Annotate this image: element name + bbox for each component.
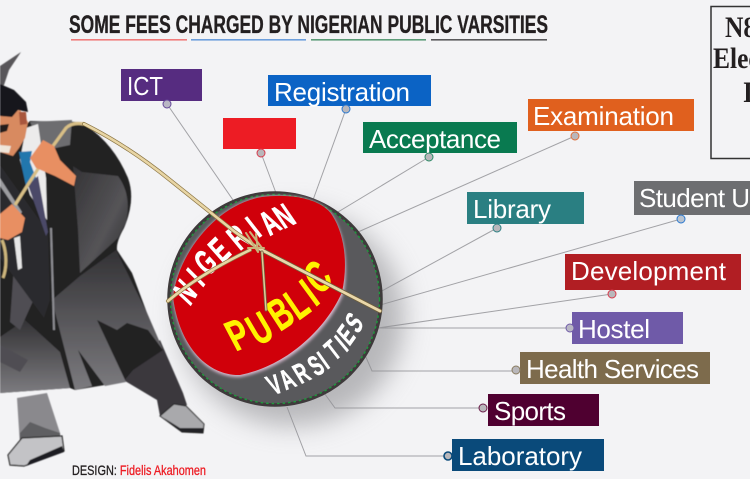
- cuff and hanging rope: [14, 236, 22, 270]
- VARSITIES: VARSITIES: [255, 303, 379, 410]
- connector lines: [167, 104, 681, 456]
- trousers: [17, 393, 62, 446]
- coin: Nigerian Public Varsities: [159, 184, 381, 410]
- label: Health Services: Health Services: [526, 354, 699, 384]
- label: Examination: [528, 99, 694, 140]
- man pulling rope: [0, 52, 204, 466]
- collar: [30, 120, 72, 150]
- label: Student U: [634, 181, 750, 223]
- label: Sports: [479, 394, 599, 426]
- label: Library: Library: [473, 194, 551, 224]
- shirt and tie: [20, 124, 47, 220]
- label: Hostel: [566, 312, 683, 344]
- label: blank red: [223, 118, 296, 157]
- boots: [8, 436, 64, 466]
- label: Registration: [268, 75, 431, 113]
- label: ICT: [121, 69, 202, 108]
- lower hand: [0, 204, 25, 240]
- rope: [84, 124, 380, 311]
- label: Hostel: Hostel: [578, 314, 650, 344]
- label: Sports: Sports: [494, 396, 566, 426]
- label: Acceptance: [363, 122, 517, 161]
- label: ICT: ICT: [127, 71, 163, 101]
- label: Registration: Registration: [274, 77, 410, 107]
- cropped sidebar box: [711, 6, 750, 158]
- label: Development: [565, 254, 741, 298]
- label: Development: Development: [571, 256, 727, 286]
- skirt panels: [52, 250, 163, 390]
- face: [0, 110, 28, 156]
- label: Laboratory: Laboratory: [458, 441, 582, 471]
- design credit: DESIGN: Fidelis Akahomen: [72, 462, 206, 478]
- label: Acceptance: Acceptance: [369, 124, 501, 154]
- sleeve: [73, 166, 128, 273]
- upper hand: [30, 140, 76, 186]
- label: Student U: Student U: [639, 183, 750, 213]
- NIGERIAN: NIGERIAN: [159, 184, 305, 319]
- red top face: [173, 196, 346, 377]
- gown silhouette: [0, 121, 163, 393]
- label: Examination: Examination: [533, 101, 674, 131]
- hair: [0, 84, 28, 117]
- label: Library: [467, 192, 584, 232]
- rope in hand: [15, 124, 84, 205]
- title: SOME FEES CHARGED BY NIGERIAN PUBLIC VARSITIES: [69, 11, 548, 39]
- coin shadow: [180, 210, 404, 426]
- cap: [0, 52, 21, 90]
- PUBLIC: PUBLIC: [210, 247, 349, 368]
